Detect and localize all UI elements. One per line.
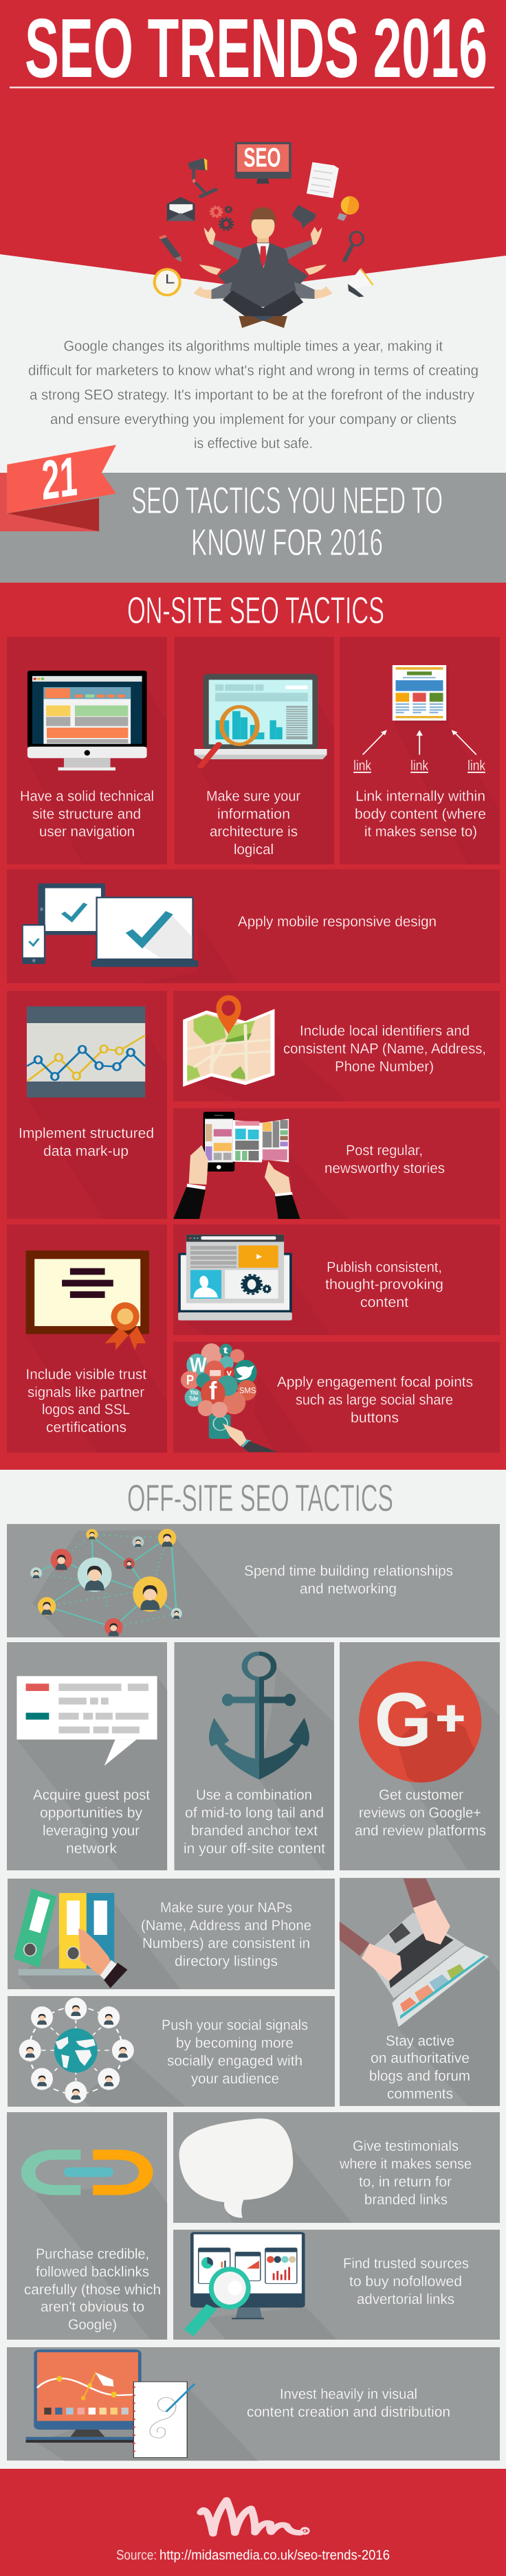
text [20,789,154,840]
panel: visual content [7,2347,500,2461]
text: your audience [191,2071,279,2087]
panel: engagement focal points [173,1342,500,1453]
text: such as large social share [296,1392,453,1408]
text: Have a solid technical [20,789,154,805]
icon: phone with fold-out news and hands [173,1112,300,1219]
text: Find trusted sources [343,2256,469,2272]
text: signals like partner [28,1385,144,1400]
panel: structured data [7,991,167,1219]
icon: certificate with ribbon [26,1251,149,1350]
text [355,1787,486,1839]
text: Apply mobile responsive design [238,914,437,930]
text: Publish consistent, [327,1259,442,1275]
text: aren't obvious to [41,2299,144,2315]
icon: design monitor and sketchbook [26,2349,258,2461]
text [162,2017,308,2087]
text: content [360,1295,408,1310]
text: Spend time building relationships [244,1563,453,1579]
icon: chain link [28,2155,167,2340]
panel: newsworthy stories [173,1108,500,1219]
text: Invest heavily in visual [280,2386,417,2402]
text: and review platforms [355,1823,486,1839]
shadow [32,1530,258,1637]
panel: social signals [8,1996,335,2107]
panel: thought-provoking content [173,1224,500,1335]
text [355,789,486,840]
banner heading: KNOW FOR 2016 [191,521,383,563]
text [343,2256,469,2307]
text: Make sure your [206,789,300,805]
text: in your off-site content [184,1841,325,1857]
text: socially engaged with [167,2053,302,2069]
text: consistent NAP (Name, Address, [283,1041,486,1057]
text: user navigation [39,824,135,840]
icon: binders and hand [14,1888,181,1989]
panel: consistent NAPs [8,1879,335,1989]
text: logos and SSL [42,1402,130,1418]
text: content creation and distribution [247,2404,450,2420]
text: Phone Number) [335,1059,434,1075]
man: suit [218,243,308,307]
banner heading [131,479,443,563]
panel: advertorial links [173,2230,500,2340]
text: Implement structured [19,1125,154,1141]
text: logical [234,842,274,858]
icon: social bubbles on phone: t [223,1345,228,1355]
icon: speech bubble [179,2118,352,2223]
text [324,1143,445,1176]
panel: customer reviews [340,1642,500,1870]
icon: SEO monitor: SEO [243,142,280,172]
text: network [66,1841,118,1857]
source line: http://midasmedia.co.uk/seo-trends-2016 [160,2548,390,2563]
intro paragraph: a strong SEO strategy. It's important to be at the forefront of the industry [30,388,474,403]
icon: magnifier [344,232,363,260]
text: site structure and [32,807,141,822]
icon: Google+ badge: G [375,1677,432,1762]
icon: social bubbles on phone [181,1343,278,1452]
text: of mid-to long tail and [185,1805,324,1821]
man: hands [194,227,332,299]
icon: web page document [393,665,448,723]
text: directory listings [175,1953,278,1969]
icon: gears [210,206,233,230]
intro paragraph [28,339,478,451]
text [24,2246,161,2333]
text: comments [387,2086,453,2102]
panel: credible backlinks [7,2112,167,2340]
text: on authoritative [371,2050,470,2066]
illustration: meditating man with icons [153,142,374,328]
panel: trust signals [7,1224,167,1453]
panel: anchor text [175,1642,334,1870]
text: Apply engagement focal points [277,1374,473,1390]
intro paragraph: Google changes its algorithms multiple times a year, making it [63,339,443,355]
icon: line chart [27,1007,145,1097]
footer [0,2469,506,2576]
text: by becoming more [176,2035,294,2051]
text: architecture is [210,824,298,840]
text: Numbers) are consistent in [142,1936,310,1951]
text: information [217,807,290,822]
intro paragraph: and ensure everything you implement for your company or clients [50,412,456,427]
section background: on-site [0,583,506,1470]
panel: local NAP [173,991,500,1101]
text: it makes sense to) [364,824,477,840]
panel: authoritative blogs [340,1878,500,2106]
icon: social bubbles on phone: You [190,1389,198,1396]
ribbon: 21 badge: 21 [36,445,81,511]
text [283,1023,486,1075]
panel: mobile responsive [7,869,500,983]
link labels: link [468,758,485,774]
icon: document [307,162,339,198]
icon: spotlight lamp [188,158,216,197]
icon: monitor with magnifier [184,2232,338,2340]
text: body content (where [355,807,486,822]
text: blogs and forum [369,2068,470,2084]
text: followed backlinks [36,2264,149,2280]
text: carefully (those which [24,2282,161,2298]
icon: social bubbles on phone: f [209,1377,217,1405]
man: back arms [210,240,316,299]
icon: comment card [16,1676,167,1870]
icon: SEO monitor [235,142,292,183]
text: Purchase credible, [36,2246,149,2262]
ribbon: 21 badge [0,445,116,531]
text [277,1374,473,1426]
text: advertorial links [357,2292,454,2307]
text: branded links [364,2192,448,2208]
text: Stay active [386,2033,454,2049]
icon: social bubbles on phone: Tube [189,1395,198,1402]
text [247,2386,450,2420]
text: thought-provoking [325,1277,443,1292]
text [244,1563,453,1597]
icon: map with pin [183,995,274,1087]
icon: three arrows [363,730,476,754]
text: Push your social signals [162,2017,308,2033]
icon: clock [153,268,182,296]
text [33,1787,150,1857]
man: crossed legs [223,291,303,328]
text: where it makes sense [339,2156,472,2172]
icon: social bubbles on phone: v [227,1368,232,1378]
text: opportunities by [40,1805,142,1821]
text: (Name, Address and Phone [141,1918,311,1934]
link labels [353,758,485,774]
text [206,789,300,858]
text: to, in return for [359,2174,452,2190]
text [369,2033,470,2102]
text: and networking [300,1581,397,1597]
icon: globe and people ring [19,1997,186,2107]
text: buttons [351,1410,399,1426]
icon: Google+ badge [359,1661,500,1870]
icon: social bubbles on phone: W [190,1354,206,1376]
icon: social bubbles on phone: P [186,1372,194,1387]
text: newsworthy stories [324,1161,445,1176]
link labels: link [353,758,371,774]
text: Include local identifiers and [300,1023,470,1039]
text [141,1900,311,1969]
panel: information architecture [175,637,334,864]
text [339,2138,472,2208]
icon: people network [30,1529,182,1637]
text: Give testimonials [353,2138,459,2154]
text: Include visible trust [26,1367,146,1382]
icon: pencil [162,236,182,262]
title rule [10,87,494,88]
icon: laptop with magnifier [195,674,327,766]
text: Use a combination [196,1787,312,1803]
panel: relationships and networking [7,1524,500,1637]
logo: Mm. [201,2500,306,2534]
icon: light bulb [338,197,359,221]
text: Make sure your NAPs [160,1900,292,1916]
text: branded anchor text [191,1823,318,1839]
text [26,1367,146,1435]
icon: social bubbles on phone: SMS [239,1385,256,1395]
panel: internal links [340,637,500,864]
icon: laptop with web page [178,1235,292,1321]
text: Get customer [379,1787,463,1803]
icon: speech bubble [292,205,316,229]
text: Google) [68,2317,117,2333]
header: red chevron background [0,0,506,288]
icon: devices with checks [22,884,198,967]
text: Post regular, [346,1143,423,1158]
text: certifications [46,1420,126,1435]
icon: megaphone [348,269,374,297]
icon: hands typing on laptop [340,1879,500,2106]
icon: anchor [209,1654,334,1870]
intro paragraph: is effective but safe. [194,436,313,451]
text [325,1259,443,1310]
icon: envelope [167,197,195,221]
man: head [250,208,276,245]
panel: guest posts [7,1642,167,1870]
panel: technical site structure [7,637,167,864]
text [19,1125,154,1159]
link labels: link [410,758,428,774]
text: Acquire guest post [33,1787,150,1803]
text: data mark-up [43,1143,129,1159]
text: to buy nofollowed [349,2274,462,2289]
icon: desktop monitor [28,671,147,770]
panel: testimonials [173,2112,500,2223]
text: Link internally within [355,789,485,805]
text: reviews on Google+ [359,1805,481,1821]
intro paragraph: difficult for marketers to know what's right and wrong in terms of creating [28,363,478,379]
source line: Source: [116,2548,157,2563]
text: leveraging your [43,1823,140,1839]
banner: grey band [0,473,506,583]
text [184,1787,325,1857]
